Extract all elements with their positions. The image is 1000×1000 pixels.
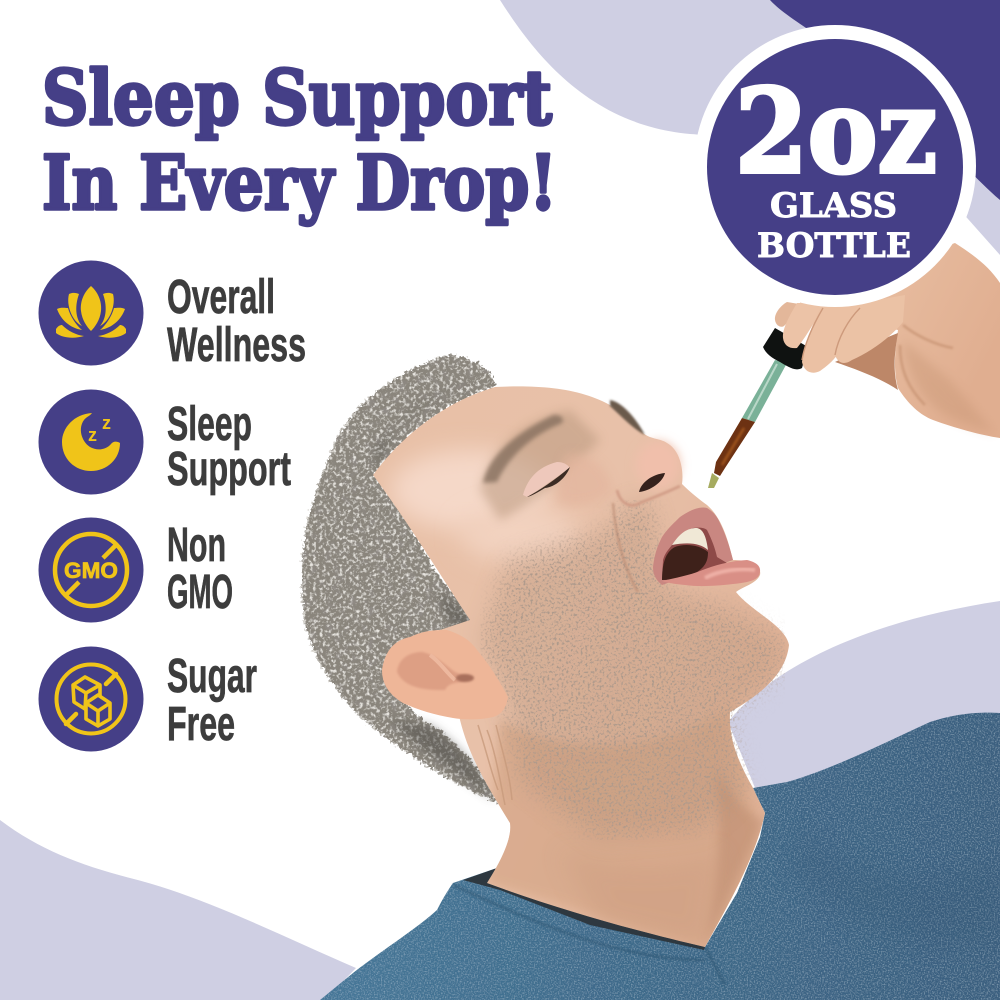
hair shadow: soft dark patches [375, 385, 505, 800]
label: Non GMO: GMO [167, 566, 233, 619]
finger 4 [835, 295, 905, 363]
label: Sugar Free: Sugar [167, 650, 257, 703]
dropper [708, 328, 808, 488]
finger 2 [783, 303, 825, 348]
ear [382, 630, 508, 719]
eyebrow [483, 400, 645, 483]
title: In Every Drop! [42, 139, 557, 227]
label: Overall Wellness: Overall [167, 271, 275, 324]
lavender blob: lower right [728, 601, 1000, 800]
nasolabial crease [613, 503, 638, 592]
icon: moon with z's: z [88, 425, 97, 445]
finger creases [802, 308, 860, 360]
benefit: sleep support [38, 390, 291, 496]
icon: no gmo: GMO [64, 558, 118, 583]
neck wrinkles [478, 725, 512, 805]
label: Sleep Support [167, 398, 291, 496]
benefit: non gmo [38, 518, 233, 622]
back fingertip [775, 302, 805, 327]
dropper tip [708, 473, 719, 488]
title: Sleep Support [42, 54, 552, 142]
mouth [653, 507, 760, 586]
badge caption [757, 186, 911, 266]
head and neck [373, 386, 789, 947]
label: Sugar Free [167, 650, 257, 751]
hand holding dropper [708, 243, 1000, 488]
eye [523, 462, 570, 497]
stubble [480, 500, 785, 840]
label: Sleep Support: Sleep [167, 398, 252, 451]
icon: lotus [38, 260, 144, 366]
badge value: 2oz: 2oz [735, 64, 937, 200]
badge caption: GLASS [770, 186, 897, 226]
icon: moon with z's: z [102, 413, 111, 433]
dropper cap [763, 328, 808, 369]
photo: man receiving dropper [302, 356, 1000, 1000]
dark purple blob: top right [770, 0, 1000, 200]
dropper glass: brown liquid [714, 418, 755, 476]
lavender blob: bottom left [0, 820, 356, 1000]
lavender blob: top right [500, 0, 1000, 255]
label: Overall Wellness [167, 271, 306, 372]
label: Overall Wellness: Wellness [167, 319, 306, 372]
title [42, 54, 557, 227]
sweater [320, 713, 1000, 1000]
label: Non GMO [167, 519, 233, 619]
label: Non GMO: Non [167, 519, 226, 572]
label: Sleep Support: Support [167, 443, 291, 496]
palm [800, 243, 1000, 438]
finger 3 [802, 303, 862, 373]
nose [617, 441, 680, 505]
badge caption: BOTTLE [757, 226, 911, 266]
label: Sugar Free: Free [167, 698, 235, 751]
badge [694, 25, 976, 307]
hair [302, 356, 510, 803]
icon: moon with z's [38, 390, 144, 494]
icon: no sugar cubes [38, 646, 144, 752]
benefit: sugar free [38, 646, 257, 752]
undershirt collar [463, 868, 705, 950]
icon: no gmo [38, 518, 144, 622]
dropper glass: green [742, 360, 787, 422]
benefit: overall wellness [38, 260, 306, 372]
web between fingers and palm [835, 333, 898, 390]
skin shading [390, 410, 785, 947]
